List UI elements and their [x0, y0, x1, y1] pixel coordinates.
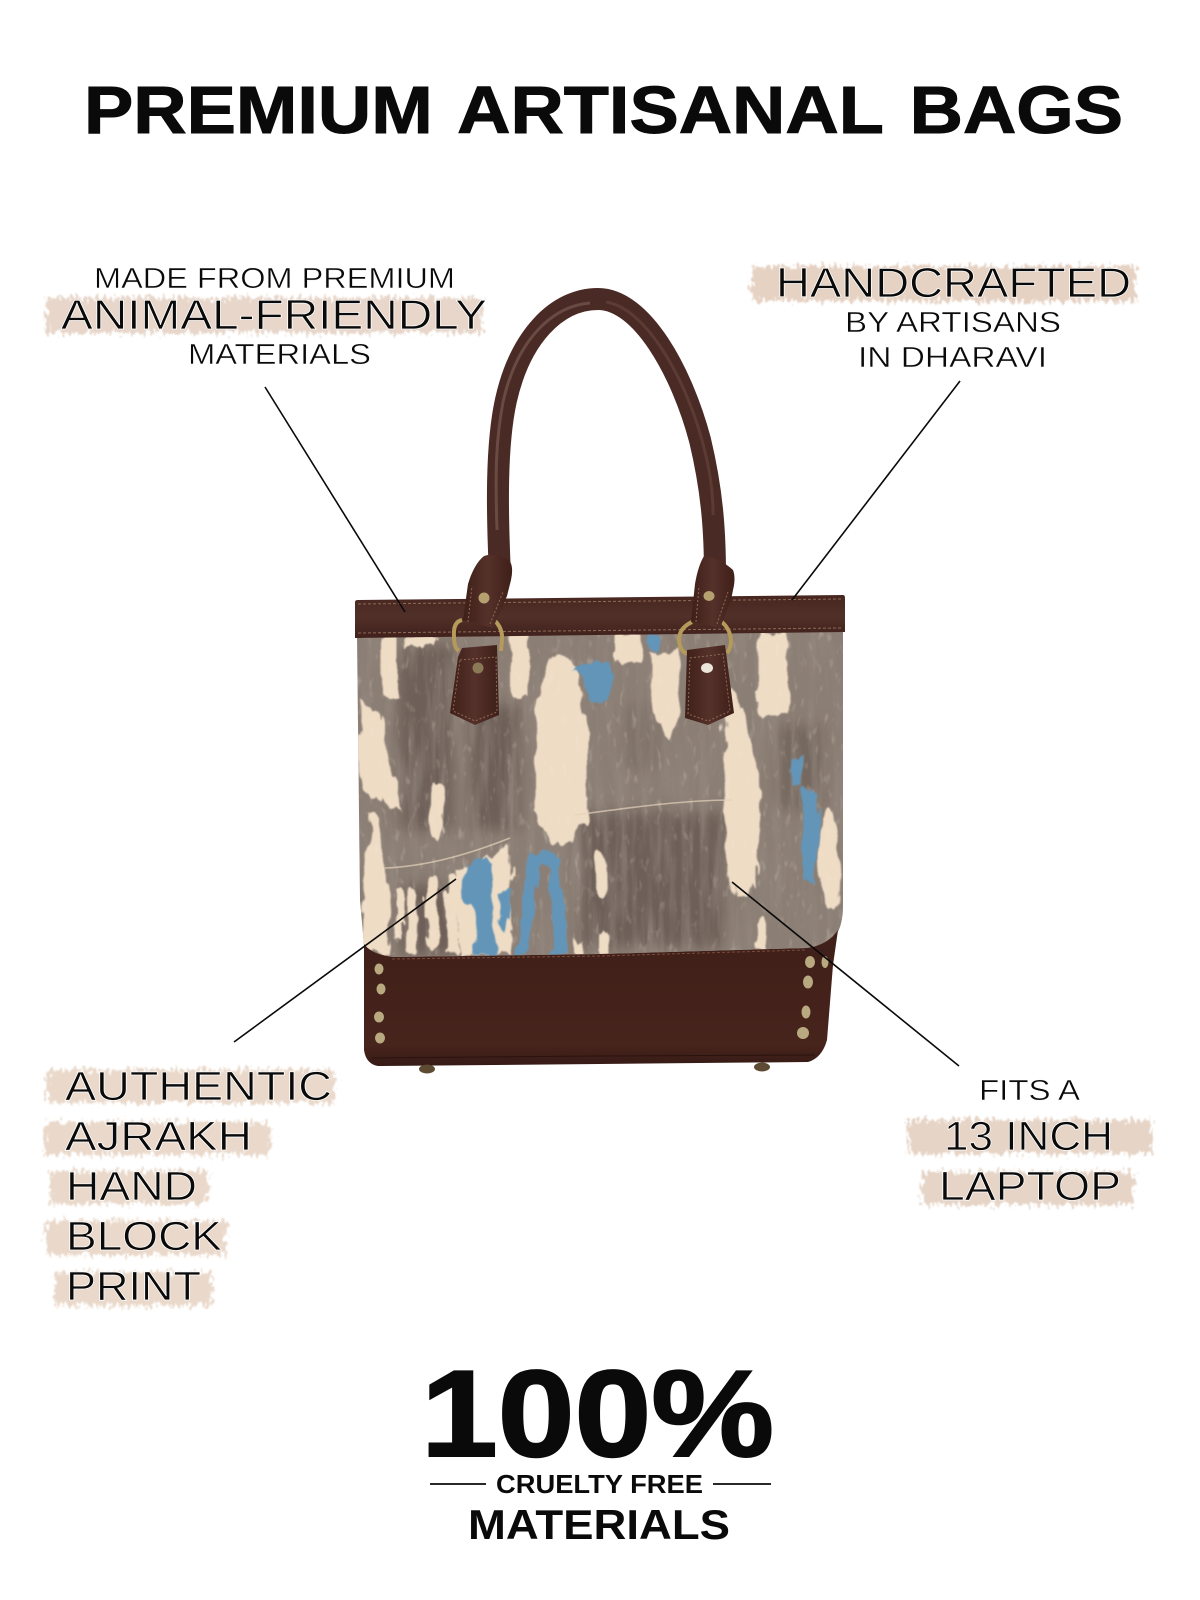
callout: fits a 13 inch laptop: [908, 1075, 1152, 1209]
text: by artisans: BY ARTISANS: [845, 307, 1061, 339]
brush highlight: [752, 266, 1136, 301]
rule right: [713, 1483, 771, 1485]
brush highlight: [46, 298, 482, 333]
text: in dharavi: IN DHARAVI: [858, 342, 1047, 374]
brush highlights: [908, 1120, 1152, 1205]
pointer line: ajrakh print: [234, 879, 456, 1042]
text: laptop: LAPTOP: [939, 1163, 1121, 1209]
pointer line: animal-friendly: [265, 387, 405, 612]
feet: [419, 1064, 435, 1074]
left d-ring and tabs: [450, 555, 512, 725]
text: 100%: 100%: [421, 1346, 774, 1483]
text: block: BLOCK: [66, 1213, 222, 1259]
text: authentic: AUTHENTIC: [65, 1063, 332, 1109]
diagonal fold lines: [385, 800, 732, 868]
right d-ring and tabs: [679, 556, 734, 725]
cream resist patterns: [358, 632, 839, 956]
title: PREMIUM ARTISANAL BAGS: [84, 73, 1123, 148]
studs: [374, 956, 828, 1044]
bottom leather panel: [364, 930, 838, 1074]
callout: authentic ajrakh hand block print: [44, 1063, 335, 1309]
callout: handcrafted by artisans: [752, 259, 1136, 374]
blue indigo patches: [463, 635, 820, 955]
text: ajrakh: AJRAKH: [65, 1113, 252, 1159]
badge: 100% cruelty free materials: [421, 1346, 774, 1548]
pointer line: handcrafted: [792, 381, 960, 600]
bag illustration: [350, 299, 850, 1074]
fabric panel with ajrakh print: [350, 625, 850, 965]
bag handle: [496, 299, 715, 575]
text: animal-friendly: ANIMAL-FRIENDLY: [61, 291, 487, 338]
callout: animal-friendly materials: [46, 263, 487, 371]
text: made from premium: MADE FROM PREMIUM: [94, 263, 455, 295]
text: materials: MATERIALS: [188, 339, 371, 371]
text: hand: HAND: [66, 1163, 197, 1209]
brush highlights: [44, 1070, 335, 1306]
text: handcrafted: HANDCRAFTED: [776, 259, 1131, 306]
rule left: [430, 1483, 486, 1485]
text: fits a: FITS A: [979, 1075, 1081, 1107]
text: print: PRINT: [66, 1263, 201, 1309]
text: 13 inch: 13 INCH: [944, 1113, 1113, 1159]
top leather band: [355, 595, 845, 638]
text: materials: MATERIALS: [468, 1501, 730, 1548]
darker print zones: [398, 645, 823, 955]
pointer line: laptop: [732, 882, 959, 1066]
text: cruelty free: CRUELTY FREE: [496, 1469, 703, 1499]
